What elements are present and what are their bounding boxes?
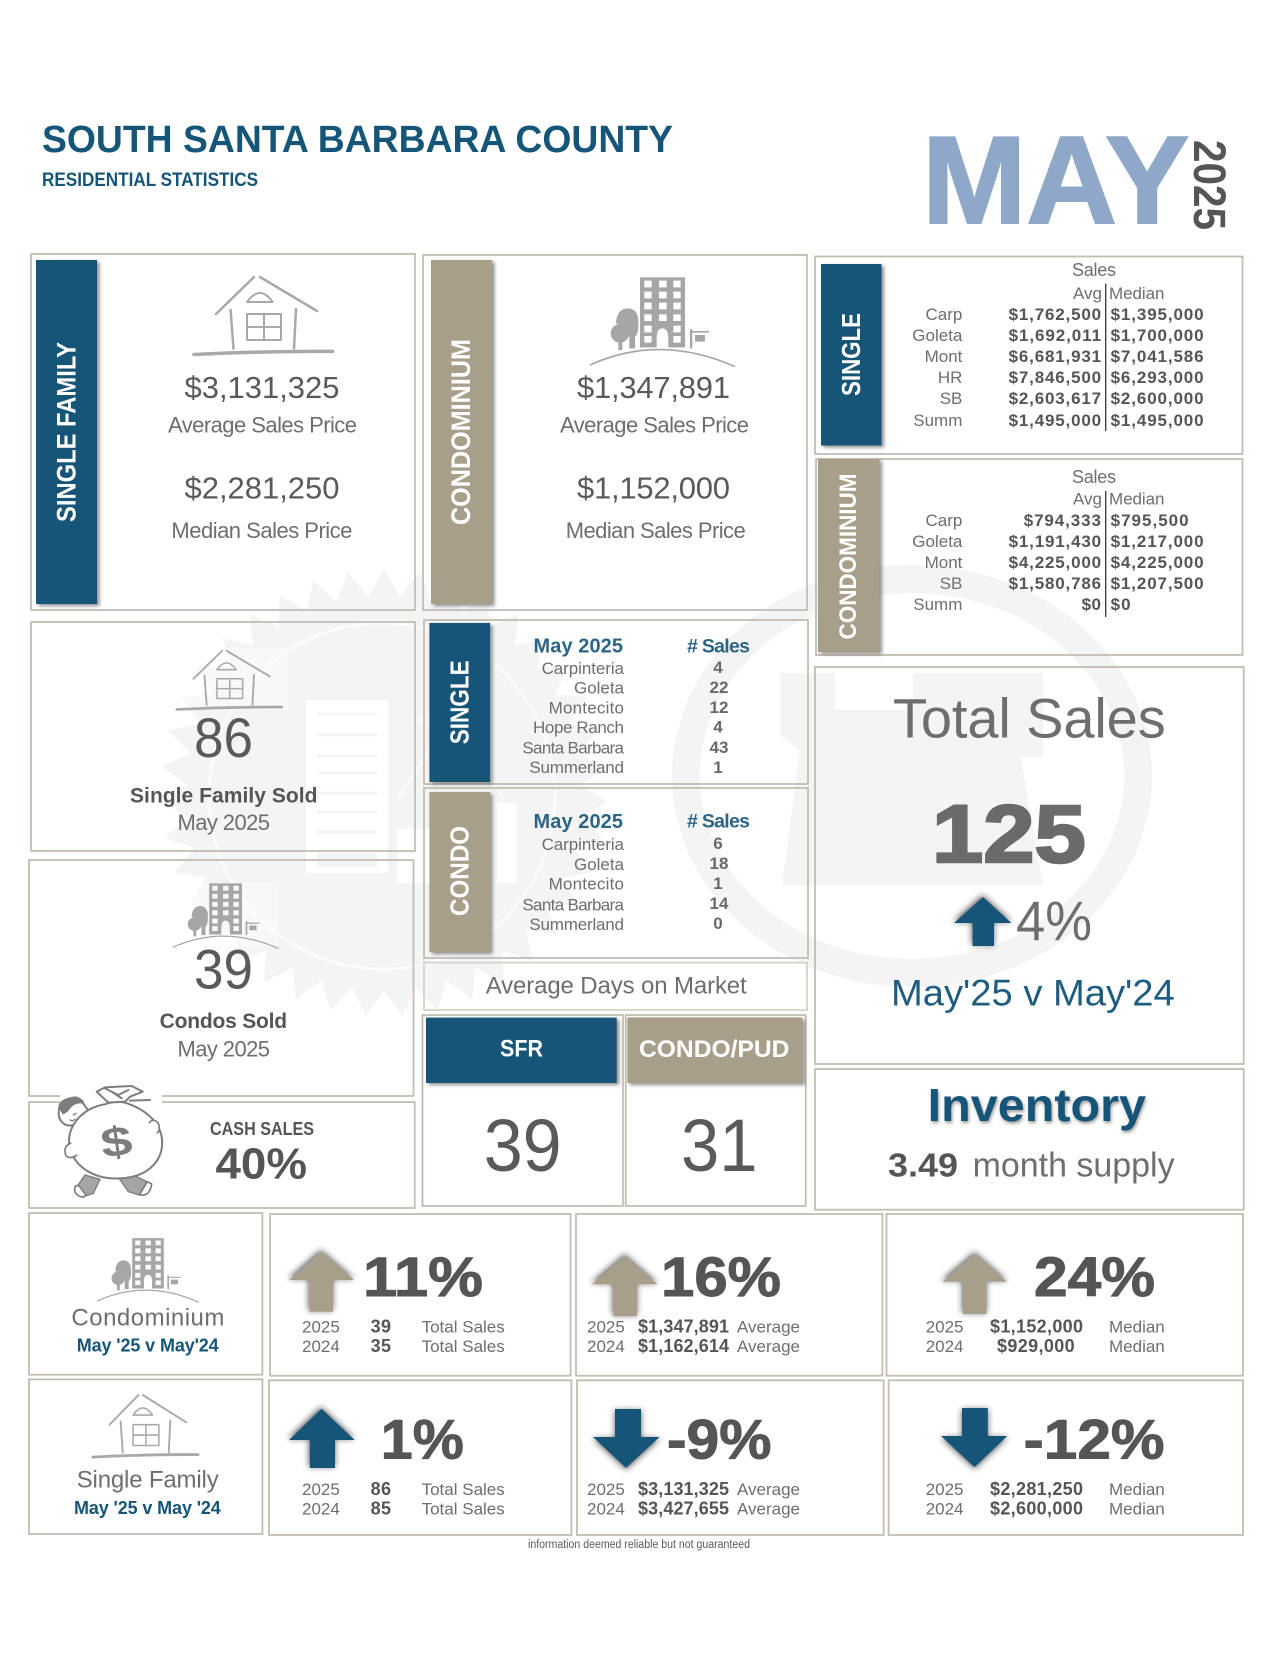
comparison rows: 39 — [371, 1316, 391, 1336]
panel: condo median price change — [886, 1214, 1243, 1376]
label: May '25 v May'24 — [77, 1336, 219, 1356]
average price: Average Sales Price — [168, 412, 357, 438]
table headings: Avg — [1073, 490, 1102, 509]
percent: 16% — [661, 1245, 781, 1308]
months of supply: month supply — [973, 1146, 1175, 1184]
sales counts: 43 — [710, 738, 728, 757]
sales counts: 4 — [713, 718, 723, 736]
area list: May 2025 — [534, 636, 623, 658]
table area labels: SB — [940, 574, 962, 593]
arrow up — [592, 1256, 658, 1316]
table headings: Sales — [1072, 260, 1116, 280]
comparison rows: 2024 — [926, 1337, 964, 1356]
area list: Summerland — [529, 758, 624, 777]
count: 39 — [194, 938, 253, 1001]
comparison rows: 2024 — [302, 1500, 340, 1519]
comparison rows: 2024 — [587, 1337, 625, 1356]
panel: single family comparison label — [29, 1379, 262, 1534]
arrow up — [954, 897, 1011, 946]
table area labels — [912, 511, 963, 614]
label: May 2025 — [178, 1037, 270, 1062]
percent: 1% — [381, 1408, 464, 1471]
comparison rows: 2025 — [302, 1480, 340, 1499]
title: SOUTH SANTA BARBARA COUNTY — [42, 119, 673, 161]
average price: Average Sales Price — [560, 412, 749, 438]
panel: single sales by area — [424, 620, 808, 784]
median price: $1,152,000 — [577, 470, 730, 506]
panel: condo area price table — [816, 459, 1242, 655]
area list — [522, 636, 625, 777]
sales counts: 6 — [713, 834, 723, 853]
icon: building — [590, 277, 735, 367]
percent: 4% — [1016, 889, 1092, 952]
label: May '25 v May '24 — [74, 1498, 221, 1518]
area list — [522, 811, 625, 934]
table values: $1,495,000 — [1009, 411, 1101, 430]
table values: $1,580,786 — [1009, 574, 1101, 593]
panel: condo sales by area — [424, 788, 808, 958]
panel: average days on market heading: Average Days on Market — [486, 972, 747, 999]
header: condo/pud: CONDO/PUD — [639, 1036, 789, 1063]
label — [130, 784, 318, 835]
comparison rows: Average — [737, 1317, 800, 1336]
background watermark seal — [160, 497, 1138, 1054]
panel: single area price table — [815, 256, 1242, 454]
table area labels: SB — [940, 389, 962, 408]
sales counts — [687, 810, 750, 933]
table area labels: Summ — [913, 411, 962, 430]
table values: $2,600,000 — [1111, 389, 1204, 408]
table area labels: Mont — [925, 347, 963, 366]
label: Single Family — [77, 1466, 219, 1493]
comparison rows: Median — [1109, 1317, 1165, 1336]
table values: $4,225,000 — [1009, 553, 1101, 572]
comparison rows: Total Sales — [422, 1337, 505, 1356]
side bar: condo: CONDO — [445, 826, 475, 916]
table values: $0 — [1082, 595, 1101, 614]
area list: May 2025 — [534, 811, 623, 833]
comparison rows: $3,427,655 — [638, 1499, 729, 1519]
side bar: condominium: CONDOMINIUM — [835, 474, 862, 640]
comparison rows: Total Sales — [422, 1317, 505, 1336]
label — [74, 1466, 221, 1518]
label — [71, 1304, 224, 1356]
area list: Goleta — [574, 679, 625, 698]
table values: $1,692,011 — [1009, 326, 1101, 345]
icon: house — [177, 651, 282, 709]
panel: cash sales — [29, 1086, 415, 1208]
panel: average days on market heading — [424, 963, 807, 1010]
median price — [566, 470, 746, 543]
comparison rows: $1,347,891 — [638, 1316, 729, 1336]
side bar: condominium — [431, 260, 492, 604]
comparison rows: 2025 — [302, 1317, 340, 1336]
average price — [168, 370, 357, 438]
count: 86 — [194, 706, 253, 769]
month heading: MAY — [922, 112, 1189, 250]
table values: $1,395,000 — [1111, 305, 1204, 324]
sales counts: # Sales — [687, 636, 750, 658]
table values: $7,041,586 — [1111, 347, 1204, 366]
panel: condo total sales change — [270, 1214, 571, 1376]
area list: Montecito — [549, 698, 624, 718]
icon: house — [194, 277, 333, 354]
months of supply: 3.49 — [888, 1146, 958, 1184]
comparison label: May'25 v May'24 — [891, 972, 1175, 1014]
panel: single family prices — [31, 254, 415, 610]
comparison rows: Median — [1109, 1337, 1165, 1356]
comparison rows: Average — [737, 1337, 800, 1356]
sales counts: 18 — [710, 854, 728, 873]
label: May 2025 — [178, 810, 270, 835]
arrow up — [289, 1409, 355, 1468]
median price: Median Sales Price — [566, 518, 746, 543]
comparison rows: Total Sales — [422, 1500, 505, 1519]
table values: $6,293,000 — [1111, 368, 1204, 387]
table area labels: HR — [938, 368, 962, 387]
sales counts: 14 — [710, 894, 729, 913]
comparison rows: $3,131,325 — [638, 1479, 729, 1499]
panel: condos sold — [29, 860, 414, 1096]
table area labels — [912, 305, 963, 430]
table area labels: Mont — [925, 553, 963, 572]
sales counts: 4 — [713, 658, 723, 677]
panel: SFR days on market — [422, 1015, 623, 1206]
table values: $1,495,000 — [1111, 411, 1204, 430]
comparison rows — [926, 1479, 1165, 1519]
sales counts — [687, 636, 750, 777]
header: condo/pud — [627, 1017, 802, 1083]
average price: $1,347,891 — [577, 370, 730, 405]
header: SFR: SFR — [500, 1036, 543, 1063]
total value: 125 — [932, 789, 1086, 880]
percent: 11% — [363, 1245, 483, 1308]
icon: man carrying money bag — [59, 1086, 162, 1197]
comparison rows: Average — [737, 1500, 800, 1519]
table area labels: Goleta — [912, 326, 963, 345]
label: Condominium — [71, 1304, 224, 1331]
comparison rows: $929,000 — [997, 1336, 1075, 1356]
area list: Santa Barbara — [522, 895, 625, 914]
comparison rows: 2025 — [587, 1317, 625, 1336]
panel: condominium comparison label — [29, 1213, 262, 1375]
table values: $6,681,931 — [1009, 347, 1101, 366]
panel: single family sold — [31, 622, 415, 851]
header: SFR — [426, 1018, 617, 1083]
sales counts: # Sales — [687, 810, 750, 832]
comparison rows: 2024 — [587, 1500, 625, 1519]
sales counts: 22 — [710, 678, 728, 697]
side bar: single — [429, 623, 490, 782]
percent: -9% — [667, 1408, 771, 1471]
comparison rows — [587, 1316, 800, 1356]
value: 31 — [681, 1104, 758, 1187]
icon: building — [173, 883, 278, 949]
comparison rows: 85 — [371, 1499, 391, 1519]
table values — [1009, 305, 1204, 430]
label: Condos Sold — [160, 1010, 287, 1033]
panel: condo average price change — [576, 1214, 882, 1376]
table values: $794,333 — [1024, 511, 1101, 530]
year vertical: 2025 — [1184, 140, 1235, 230]
comparison rows: 2024 — [926, 1500, 964, 1519]
sales counts: 1 — [713, 758, 723, 777]
side bar: condominium — [818, 459, 880, 652]
label and percent — [210, 1119, 314, 1188]
percent: -12% — [1024, 1408, 1164, 1471]
icon: building — [97, 1238, 199, 1302]
table values: $1,700,000 — [1111, 326, 1204, 345]
label and percent: CASH SALES — [210, 1119, 314, 1139]
arrow down — [941, 1408, 1007, 1467]
panel: single family average price change — [577, 1380, 884, 1535]
area list: Carpinteria — [542, 835, 625, 854]
median price — [171, 470, 352, 543]
comparison rows: 35 — [371, 1336, 391, 1356]
arrow down — [593, 1409, 660, 1468]
value: 39 — [484, 1104, 562, 1187]
comparison rows: $2,600,000 — [990, 1499, 1083, 1519]
heading: Inventory — [928, 1079, 1146, 1131]
table values: $1,762,500 — [1009, 305, 1101, 324]
side bar: single: SINGLE — [836, 313, 866, 396]
comparison rows: Average — [737, 1480, 800, 1499]
percent: 24% — [1034, 1245, 1155, 1308]
table headings: Median — [1109, 490, 1164, 509]
panel: condominium prices — [423, 255, 807, 610]
area list: Carpinteria — [542, 659, 625, 678]
table values: $1,191,430 — [1009, 532, 1101, 551]
table values: $4,225,000 — [1111, 553, 1204, 572]
sales counts: 12 — [710, 698, 728, 717]
comparison rows: Median — [1109, 1480, 1165, 1499]
side bar: condo — [429, 792, 490, 952]
table headings — [1072, 467, 1164, 509]
table values: $1,217,000 — [1111, 532, 1204, 551]
table values: $0 — [1111, 595, 1131, 614]
table headings: Sales — [1072, 467, 1116, 487]
comparison rows: $1,162,614 — [638, 1336, 729, 1356]
heading: Total Sales — [893, 686, 1166, 749]
area list: Montecito — [549, 874, 624, 893]
label and percent: 40% — [216, 1140, 307, 1188]
area list: Summerland — [529, 915, 624, 934]
comparison rows: 86 — [371, 1479, 391, 1499]
table values: $795,500 — [1111, 511, 1189, 530]
comparison rows — [926, 1316, 1165, 1356]
table values: $2,603,617 — [1009, 389, 1101, 408]
panel: condo/pud days on market — [626, 1015, 806, 1206]
side bar: single: SINGLE — [445, 660, 475, 744]
side bar: condominium: CONDOMINIUM — [446, 339, 476, 525]
table headings: Median — [1109, 284, 1164, 303]
comparison rows: Total Sales — [422, 1480, 505, 1499]
footer disclaimer: information deemed reliable but not guaranteed — [528, 1539, 750, 1551]
comparison rows: 2025 — [587, 1480, 625, 1499]
table headings — [1072, 260, 1164, 303]
comparison rows: $2,281,250 — [990, 1479, 1083, 1499]
area list: Goleta — [574, 855, 625, 874]
label — [160, 1010, 287, 1062]
table area labels: Carp — [926, 511, 962, 530]
table values: $1,207,500 — [1111, 574, 1204, 593]
median price: Median Sales Price — [171, 518, 352, 543]
side bar: single — [821, 264, 882, 446]
arrow up — [942, 1254, 1007, 1314]
table values — [1009, 511, 1204, 614]
icon: man carrying money bag: $ — [98, 1117, 135, 1167]
table area labels: Carp — [926, 305, 962, 324]
comparison rows — [302, 1316, 505, 1356]
area list: Santa Barbara — [522, 738, 625, 757]
average price — [560, 370, 749, 438]
panel: total sales — [815, 667, 1244, 1064]
comparison rows: 2025 — [926, 1317, 964, 1336]
sales counts: 1 — [713, 874, 723, 893]
table headings: Avg — [1073, 284, 1102, 303]
arrow up — [289, 1252, 354, 1312]
sales counts: 0 — [713, 914, 723, 933]
comparison rows: 2024 — [302, 1337, 340, 1356]
average price: $3,131,325 — [184, 370, 340, 405]
comparison rows: 2025 — [926, 1480, 964, 1499]
table area labels: Goleta — [912, 532, 963, 551]
label: Single Family Sold — [130, 784, 318, 808]
comparison rows — [587, 1479, 800, 1519]
panel: single family median price change — [889, 1380, 1243, 1535]
side bar: single family: SINGLE FAMILY — [52, 342, 82, 522]
table area labels: Summ — [913, 595, 962, 614]
comparison rows — [302, 1479, 505, 1519]
side bar: single family — [36, 260, 97, 604]
table values: $7,846,500 — [1009, 368, 1101, 387]
subtitle: RESIDENTIAL STATISTICS — [42, 170, 258, 191]
comparison rows: $1,152,000 — [990, 1316, 1083, 1336]
panel: single family total sales change — [269, 1380, 571, 1535]
area list: Hope Ranch — [533, 718, 624, 737]
panel: inventory — [815, 1069, 1244, 1210]
comparison rows: Median — [1109, 1500, 1165, 1519]
icon: house — [93, 1395, 198, 1457]
median price: $2,281,250 — [184, 470, 340, 506]
